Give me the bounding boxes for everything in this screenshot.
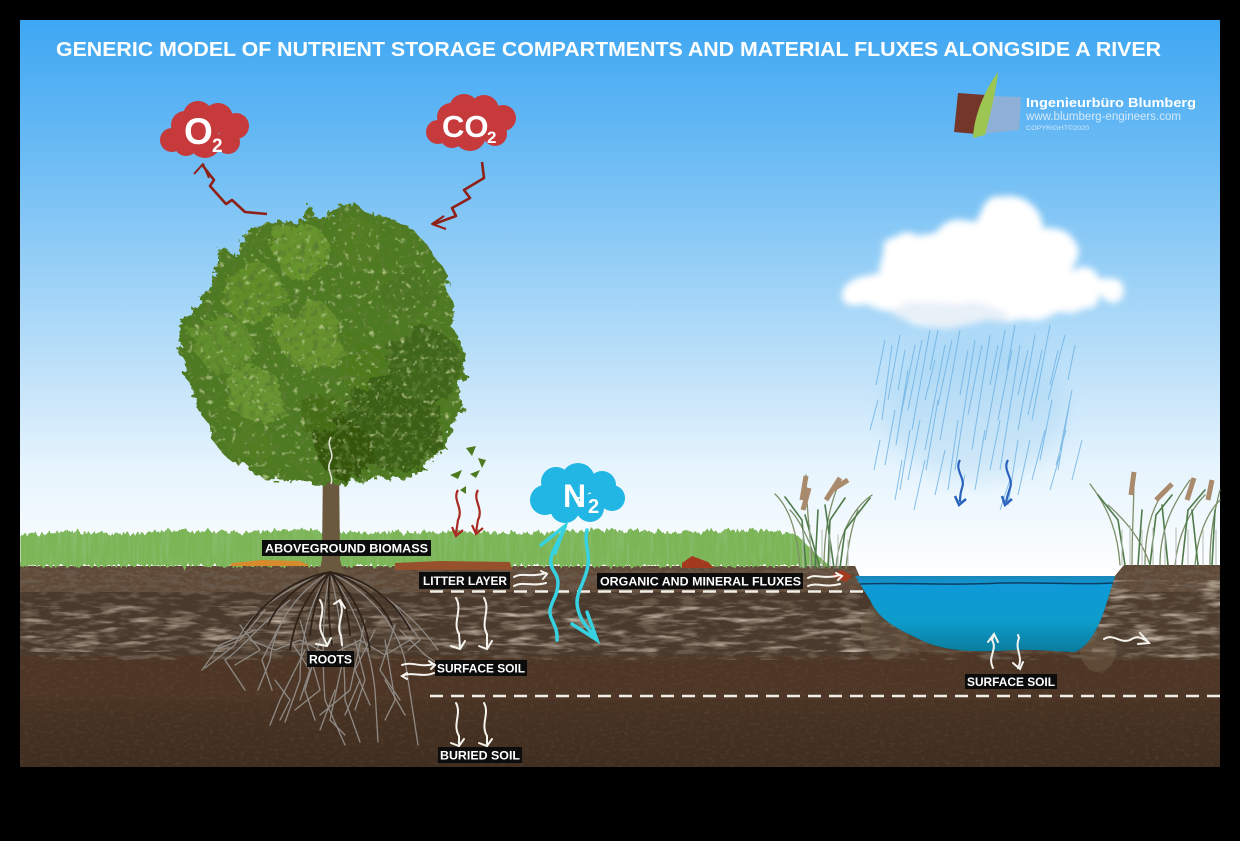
logo text: COPYRIGHT©2020 xyxy=(1026,125,1090,132)
rain xyxy=(870,325,1082,510)
litter: orange and red leaves xyxy=(230,556,852,582)
roots xyxy=(202,572,440,745)
N2 cloud: 2 xyxy=(588,496,599,518)
reeds left xyxy=(775,475,872,568)
arrow: CO2 uptake xyxy=(432,162,484,229)
arrows: organic flux xyxy=(808,573,842,586)
O2 cloud: O xyxy=(184,111,213,152)
arrows: litter flux xyxy=(514,571,547,586)
label: ORGANIC AND MINERAL FLUXES: ORGANIC AND MINERAL FLUXES xyxy=(600,574,801,588)
O2 cloud: 2 xyxy=(212,136,223,157)
arrows: surface soil down xyxy=(451,598,492,649)
N2 cloud: N xyxy=(563,478,586,514)
arrows: nitrogen exchange xyxy=(541,526,597,640)
white flux arrows xyxy=(316,571,1149,746)
grass strip xyxy=(20,530,830,566)
label: SURFACE SOIL right: SURFACE SOIL xyxy=(967,675,1055,689)
trunk flux arrow xyxy=(329,437,332,484)
river water xyxy=(855,576,1115,652)
background: sky xyxy=(20,20,1220,580)
arrows: leaf fall xyxy=(452,490,483,536)
arrows: buried soil down xyxy=(451,703,492,746)
white cloud xyxy=(843,196,1124,328)
arrow: bank seepage xyxy=(1104,633,1149,644)
logo text xyxy=(1025,95,1196,132)
label: SURFACE SOIL left: SURFACE SOIL xyxy=(437,662,525,676)
logo mark xyxy=(954,72,1021,138)
label: ABOVEGROUND BIOMASS: ABOVEGROUND BIOMASS xyxy=(265,542,428,556)
label: LITTER LAYER: LITTER LAYER xyxy=(423,574,507,588)
CO2 cloud xyxy=(426,94,516,151)
reeds right xyxy=(1090,472,1220,565)
arrows: root side flux xyxy=(402,661,435,679)
CO2 cloud: CO xyxy=(442,109,488,144)
label: BURIED SOIL: BURIED SOIL xyxy=(440,748,520,762)
tree crown xyxy=(184,209,466,484)
logo text: www.blumberg-engineers.com xyxy=(1025,111,1181,123)
arrows: riverbed exchange xyxy=(988,634,1023,669)
O2 cloud xyxy=(160,101,249,158)
logo: Ingenieurbüro Blumberg xyxy=(954,72,1196,138)
falling leaves xyxy=(450,446,486,494)
label: ROOTS: ROOTS xyxy=(309,652,352,666)
tree xyxy=(184,209,466,574)
tree trunk xyxy=(318,460,344,574)
panel: soil cross-section xyxy=(20,565,1220,767)
arrows: root fluxes xyxy=(316,600,345,646)
title: GENERIC MODEL OF NUTRIENT STORAGE COMPARTMENTS AND MATERIAL FLUXES ALONGSIDE A RIVER xyxy=(56,38,1161,61)
N2 cloud xyxy=(530,463,625,523)
CO2 cloud: 2 xyxy=(487,128,496,147)
logo text: Ingenieurbüro Blumberg xyxy=(1026,95,1196,110)
rain arrows xyxy=(955,460,1012,505)
arrow: O2 release xyxy=(194,164,267,214)
dashed soil boundaries xyxy=(430,592,1220,696)
